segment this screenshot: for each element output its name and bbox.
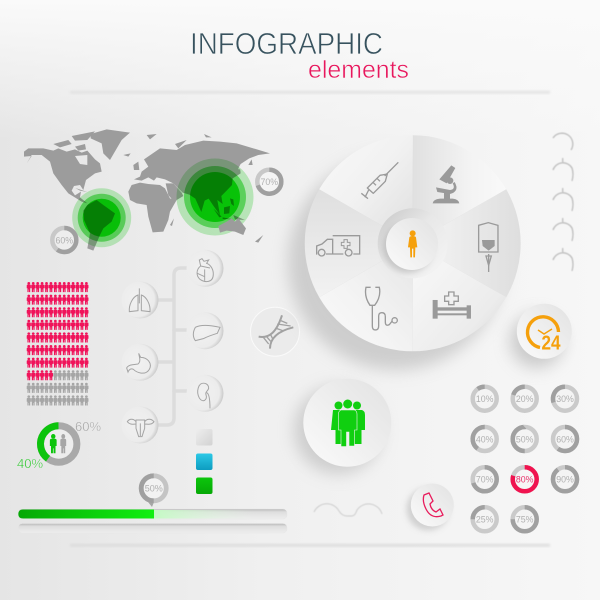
icon: IV bag — [479, 223, 498, 272]
donut 20%: 20% — [516, 394, 534, 404]
progress bar — [18, 509, 287, 519]
medical wheel — [305, 135, 521, 351]
right connector arcs — [553, 133, 573, 271]
Australia — [218, 218, 246, 235]
donut: 70% map — [257, 170, 281, 194]
clock 24 badge — [510, 304, 572, 368]
donut 25%: 25% — [476, 515, 494, 525]
icon: person — [408, 230, 417, 257]
donut 80% highlighted — [513, 467, 537, 491]
organ: stomach — [122, 344, 158, 381]
donut 10% — [468, 382, 501, 415]
world map — [24, 129, 270, 251]
donut 70%: 70% — [476, 475, 494, 485]
donut: 60% map: 60% — [55, 235, 73, 245]
donut 30% — [550, 384, 580, 414]
donut: 60% map — [52, 228, 76, 252]
donut 20% — [510, 384, 540, 414]
marker: Asia glow — [176, 158, 254, 236]
donut 90% — [553, 467, 577, 491]
color swatch: green — [196, 478, 212, 494]
donut 50% pin: 50% — [145, 484, 163, 494]
donut 75%: 75% — [516, 515, 534, 525]
donut 50% — [513, 427, 537, 451]
donut 60%: 60% — [556, 434, 574, 444]
gender donut chart: 60% — [75, 419, 101, 434]
donut 25% — [473, 507, 497, 531]
icon: syringe — [361, 162, 398, 199]
people grid chart — [27, 282, 88, 405]
donut: 70% map: 70% — [260, 177, 278, 187]
soft shadows of upper and lower rules — [70, 91, 550, 94]
donut 50%: 50% — [516, 434, 534, 444]
icon: hospital bed — [433, 300, 471, 319]
donut 70% — [473, 467, 497, 491]
color swatch: blue — [196, 454, 212, 470]
organ: liver — [186, 312, 224, 349]
clock 24 badge: 24 — [542, 332, 561, 354]
title: elements — [308, 56, 409, 84]
donut 90%: 90% — [556, 475, 574, 485]
people group disc — [294, 379, 391, 474]
organ: kidney — [186, 375, 224, 412]
organ: uterus — [122, 406, 158, 444]
organ connector tree — [155, 268, 190, 425]
organ: heart — [186, 250, 224, 287]
DNA disc — [250, 307, 300, 356]
icon: stethoscope — [365, 287, 397, 330]
donut 10%: 10% — [476, 394, 494, 404]
color swatch: white — [196, 429, 212, 446]
donut 50% pin — [141, 476, 166, 507]
organ: lungs — [122, 282, 158, 318]
gender donut chart: 40% — [17, 456, 43, 471]
empty progress bar — [18, 524, 287, 533]
gender donut chart — [17, 419, 101, 471]
icon: ambulance — [317, 236, 360, 256]
donut 75% — [513, 507, 537, 531]
percent donuts — [468, 382, 580, 531]
title: INFOGRAPHIC — [190, 26, 383, 61]
marker: South America glow — [72, 188, 131, 247]
arch cutouts — [314, 504, 382, 516]
icon: green people — [331, 400, 365, 446]
donut 60% — [553, 427, 577, 451]
donut 40%: 40% — [476, 434, 494, 444]
donut 40% — [468, 422, 501, 456]
icon: microscope — [433, 165, 459, 203]
center well and button — [378, 208, 448, 278]
phone disc — [406, 484, 454, 530]
title — [190, 26, 409, 84]
donut 30%: 30% — [556, 394, 574, 404]
donut 80% highlighted: 80% — [516, 475, 534, 485]
wheel shadow — [288, 154, 504, 370]
wheel segments — [305, 135, 521, 351]
